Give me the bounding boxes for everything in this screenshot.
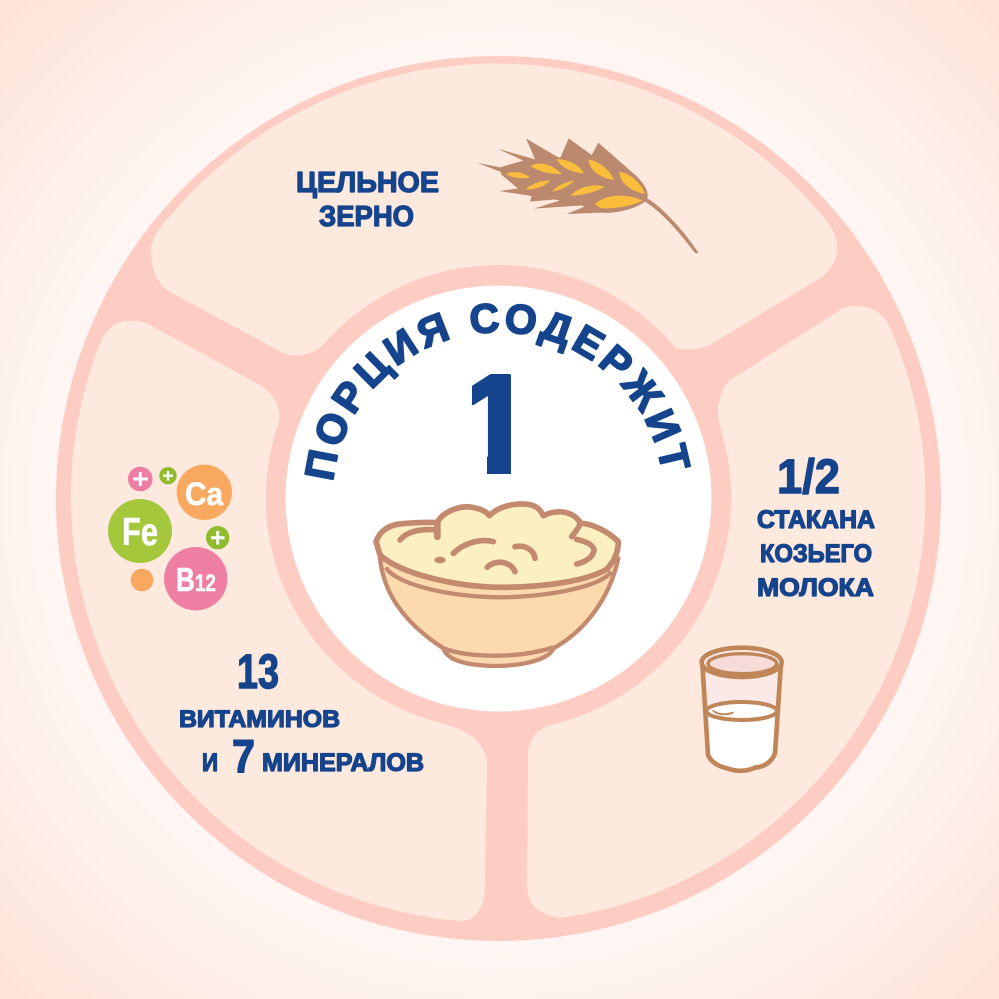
bubble: Ca	[177, 465, 232, 520]
icon: mineral bubbles	[108, 465, 232, 610]
bubble: small green plus	[159, 467, 177, 484]
panel: goat milk	[527, 306, 925, 918]
bubble: green plus	[206, 526, 229, 549]
heading: whole grain	[296, 167, 439, 233]
bubble: orange dot	[131, 569, 153, 591]
number: one serving: 1	[457, 345, 535, 503]
text: 13 vitamins and 7 minerals: МИНЕРАЛОВ	[262, 749, 424, 777]
bubble: Fe: Fe	[122, 511, 158, 554]
bubble: B12: B12	[176, 561, 216, 598]
icon: wheat ear	[477, 138, 699, 253]
white disc	[286, 286, 712, 712]
panel: center serving circle	[286, 286, 712, 712]
heading: whole grain: ЦЕЛЬНОЕ	[296, 167, 439, 199]
text: half a glass of goat milk: 1/2	[777, 451, 840, 504]
text: 13 vitamins and 7 minerals: 13	[237, 646, 279, 699]
text: 13 vitamins and 7 minerals: ВИТАМИНОВ	[179, 706, 340, 733]
text: 13 vitamins and 7 minerals: 7	[232, 730, 255, 782]
heading: curved serving title: ПОРЦИЯ СОДЕРЖИТ	[304, 303, 691, 480]
bubble: B12	[164, 547, 227, 610]
bubble: Ca: Ca	[185, 476, 223, 512]
bubble: pink plus	[128, 467, 153, 491]
text: 13 vitamins and 7 minerals: И	[202, 749, 218, 777]
panel: whole grain	[151, 64, 837, 355]
heading: whole grain: ЗЕРНО	[319, 201, 414, 233]
text: 13 vitamins and 7 minerals	[179, 646, 424, 782]
panel shape: top segment	[151, 64, 837, 355]
text: half a glass of goat milk: СТАКАНА	[757, 506, 875, 534]
icon: glass of milk	[702, 648, 782, 771]
bubble: Fe	[108, 499, 172, 563]
panel: vitamins and minerals	[71, 321, 487, 921]
text: half a glass of goat milk	[757, 451, 875, 602]
icon: porridge bowl	[376, 504, 618, 666]
text: half a glass of goat milk: МОЛОКА	[757, 574, 874, 602]
plate ring	[56, 56, 941, 941]
panel shape: right segment	[527, 306, 925, 918]
text: half a glass of goat milk: КОЗЬЕГО	[760, 540, 872, 568]
panel shape: left segment	[71, 321, 487, 921]
